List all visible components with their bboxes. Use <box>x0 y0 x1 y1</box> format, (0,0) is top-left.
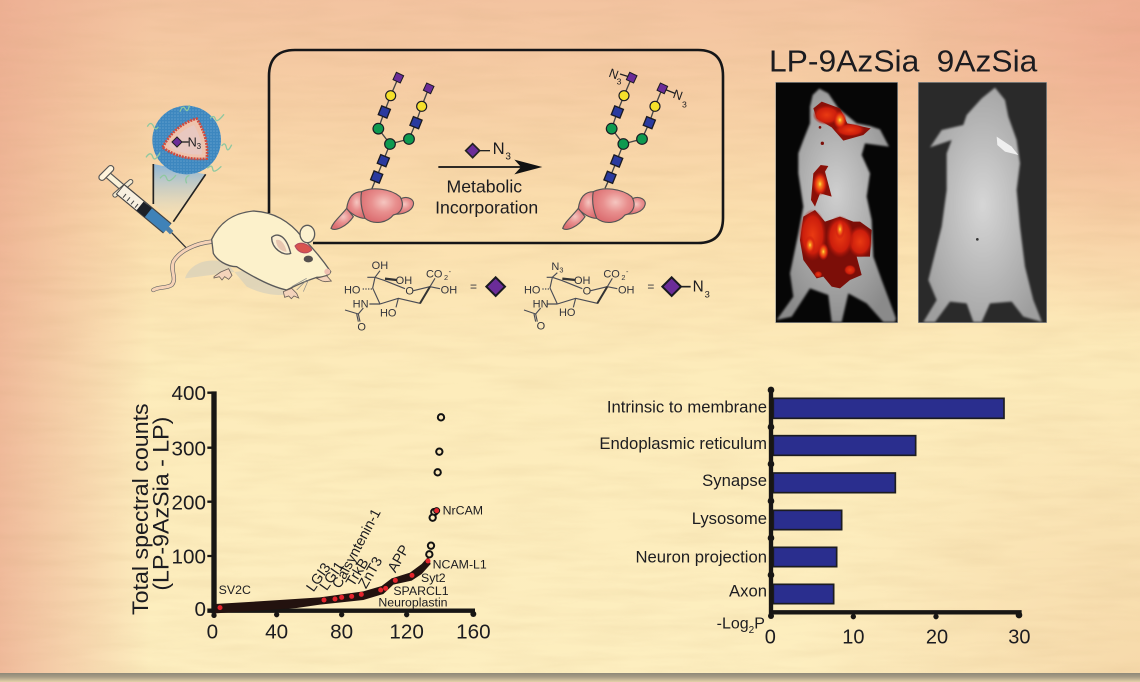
chemical structure: 9-azido sialic acid: 2 <box>621 273 625 282</box>
chemical structure: 9-azido sialic acid: N <box>551 261 559 273</box>
chemical structure: 9-azido sialic acid: CO <box>603 268 620 280</box>
chemical structure: sialic acid: CO <box>426 268 443 280</box>
chemical structure: 9-azido sialic acid: HO <box>524 284 541 296</box>
axis tick labels: 200 <box>172 491 206 514</box>
icon: brain with azide-labelled glycan <box>563 66 687 229</box>
axis title: 2 <box>749 625 755 636</box>
chemical structure: 9-azido sialic acid: OH <box>618 284 635 296</box>
panel: glycan reaction and chemical structures <box>331 66 710 334</box>
azide glycan chain: 3 <box>682 99 687 109</box>
azide glycan chain: N <box>607 66 620 82</box>
azide glycan chain: 3 <box>617 76 622 86</box>
connector cone <box>153 164 206 222</box>
icon: azido diamond legend: N <box>693 278 704 295</box>
chemical structure: 9-azido sialic acid: HN <box>533 298 549 310</box>
panel: metabolic incorporation box <box>269 50 723 243</box>
protein labels: Syt2 <box>421 571 446 585</box>
arrow <box>438 160 542 174</box>
chemical structure: sialic acid: 2 <box>444 273 448 282</box>
chemical structure: sialic acid: HO <box>380 308 397 320</box>
reaction arrow with label <box>435 139 542 217</box>
azide glycan chain: N <box>671 87 685 103</box>
chemical structure: sialic acid: HN <box>353 298 369 310</box>
icon: sialic acid diamond <box>486 277 505 296</box>
axis tick labels: 300 <box>172 437 206 460</box>
icon: azido sialic acid <box>466 139 511 162</box>
protein labels: SV2C <box>219 583 251 597</box>
axis tick labels <box>765 626 1030 648</box>
icon: mouse <box>153 211 331 299</box>
icon: brain with unlabelled glycan <box>331 72 434 229</box>
photo: LP-9AzSia mouse with fluorescence <box>776 82 898 323</box>
axis tick labels: 0 <box>194 598 206 621</box>
arrow label: Incorporation <box>435 197 538 217</box>
category labels: Lysosome <box>692 509 767 528</box>
bars <box>773 398 1004 604</box>
chemical structure: sialic acid: OH <box>372 260 388 272</box>
chemical structure: 9-azido sialic acid: O <box>537 320 546 332</box>
axis title: P <box>754 615 765 632</box>
chemical structure: 9-azido sialic acid: = <box>647 280 654 294</box>
category labels: Axon <box>729 582 767 601</box>
photo: 9AzSia control mouse <box>918 82 1047 323</box>
chemical structure: 9-azido sialic acid <box>524 261 654 332</box>
protein labels: SPARCL1 <box>393 584 449 598</box>
protein labels: TrkB <box>343 556 372 589</box>
icon: liposome nanoparticle: 3 <box>197 142 202 151</box>
category labels: Synapse <box>702 471 767 490</box>
arrow label: Metabolic <box>447 177 522 197</box>
glycan chain <box>371 72 434 189</box>
axis tick labels: 100 <box>172 545 206 568</box>
axis tick labels: 0 <box>765 626 776 648</box>
heat signal: torso <box>811 165 832 207</box>
azide glycan chain <box>604 66 687 188</box>
heat signal: head <box>813 102 871 145</box>
chemical structure: sialic acid: = <box>470 280 477 294</box>
axis tick labels: 0 <box>207 620 218 643</box>
chemical structure: 9-azido sialic acid: HO <box>559 307 576 319</box>
y axis title: Total spectral counts <box>128 403 153 615</box>
axis tick labels: 10 <box>842 626 864 648</box>
axis tick labels: 160 <box>456 620 491 643</box>
chemical structure: sialic acid <box>344 260 477 334</box>
chemical structure: 9-azido sialic acid: O <box>583 286 592 298</box>
axis title: -Log <box>717 615 749 632</box>
protein labels: Neuroplastin <box>378 595 448 609</box>
protein labels: APP <box>385 543 413 575</box>
axis tick labels: 80 <box>330 620 353 643</box>
axes <box>207 391 476 618</box>
y axis title: (LP-9AzSia - LP) <box>149 417 174 591</box>
axis tick labels: 20 <box>926 626 948 648</box>
chemical structure: 9-azido sialic acid: 3 <box>559 266 563 275</box>
chart: -Log2P gene ontology bars <box>599 387 1030 648</box>
protein labels: NCAM-L1 <box>433 558 487 572</box>
heading: 9AzSia: 9AzSia <box>937 46 1037 79</box>
icon: azido diamond legend <box>662 277 710 299</box>
y axis title <box>128 403 174 615</box>
panel: nanoparticle injection into mouse <box>102 105 331 299</box>
chemical structure: sialic acid: O <box>405 286 414 298</box>
chemical structure: sialic acid: O <box>357 322 366 334</box>
chemical structure: sialic acid: OH <box>396 275 412 287</box>
icon: liposome nanoparticle: N <box>188 135 197 149</box>
protein labels: ZnT3 <box>356 554 386 591</box>
category labels: Endoplasmic reticulum <box>599 434 767 453</box>
chemical structure: sialic acid: - <box>449 267 452 276</box>
axis tick labels <box>172 382 491 643</box>
protein labels: NrCAM <box>443 504 483 518</box>
axis tick labels: 40 <box>265 620 288 643</box>
axis tick labels: 400 <box>172 382 206 405</box>
data: protein points band <box>215 557 431 613</box>
chemical structure: 9-azido sialic acid: - <box>626 267 629 276</box>
icon: liposome nanoparticle <box>146 105 232 183</box>
protein labels: LGI3 <box>304 560 334 595</box>
category labels: Neuron projection <box>636 548 767 567</box>
icon: syringe <box>102 169 187 248</box>
protein labels: LGI1 <box>317 559 348 594</box>
protein labels: Calsyntenin-1 <box>329 506 385 591</box>
icon: azido diamond legend: 3 <box>705 289 710 299</box>
panel: whole-body imaging <box>769 46 1047 323</box>
heat signal: abdomen <box>799 209 873 288</box>
data: highlighted red points <box>217 508 440 610</box>
brain <box>331 189 414 229</box>
heading: LP-9AzSia: LP-9AzSia <box>769 46 919 79</box>
chart: total spectral counts scatter plot <box>128 382 491 643</box>
axis tick labels: 30 <box>1008 626 1030 648</box>
protein labels <box>219 504 487 609</box>
chemical structure: sialic acid: OH <box>441 284 457 296</box>
data: open circles <box>426 414 444 557</box>
chemical structure: 9-azido sialic acid: OH <box>574 275 591 287</box>
icon: azido sialic acid: 3 <box>505 151 511 162</box>
category labels: Intrinsic to membrane <box>607 398 767 417</box>
icon: azido sialic acid: N <box>493 139 505 158</box>
chemical structure: sialic acid: HO <box>344 284 361 296</box>
axis tick labels: 120 <box>389 620 424 643</box>
azide brain <box>563 189 645 229</box>
axes <box>768 387 1022 619</box>
category labels <box>599 398 767 601</box>
